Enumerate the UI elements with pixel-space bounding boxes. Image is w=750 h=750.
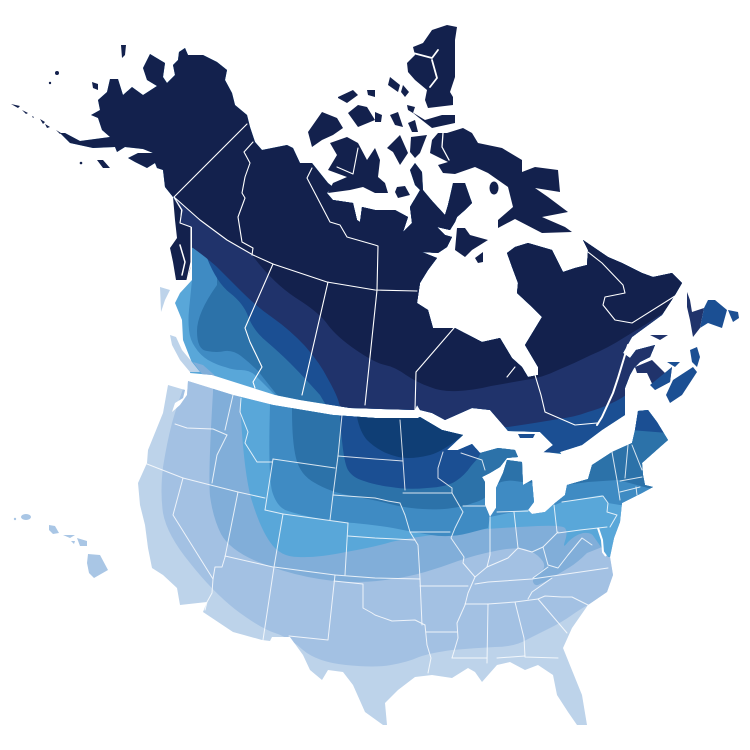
panel: Atlantic Canada xyxy=(518,292,739,438)
panel: United States state borders xyxy=(147,395,642,673)
icon: Vancouver Island and Haida Gwaii xyxy=(160,287,200,372)
panel: Arctic islands xyxy=(11,25,572,263)
icon: Hawaiian Islands xyxy=(14,514,108,578)
panel: Canadian province borders xyxy=(174,50,675,425)
icon: Alaska panhandle xyxy=(170,197,191,280)
panel: United States bands xyxy=(138,381,668,725)
icon: Chesapeake Bay xyxy=(598,528,606,556)
panel: Canada and Alaska bands xyxy=(60,48,682,454)
